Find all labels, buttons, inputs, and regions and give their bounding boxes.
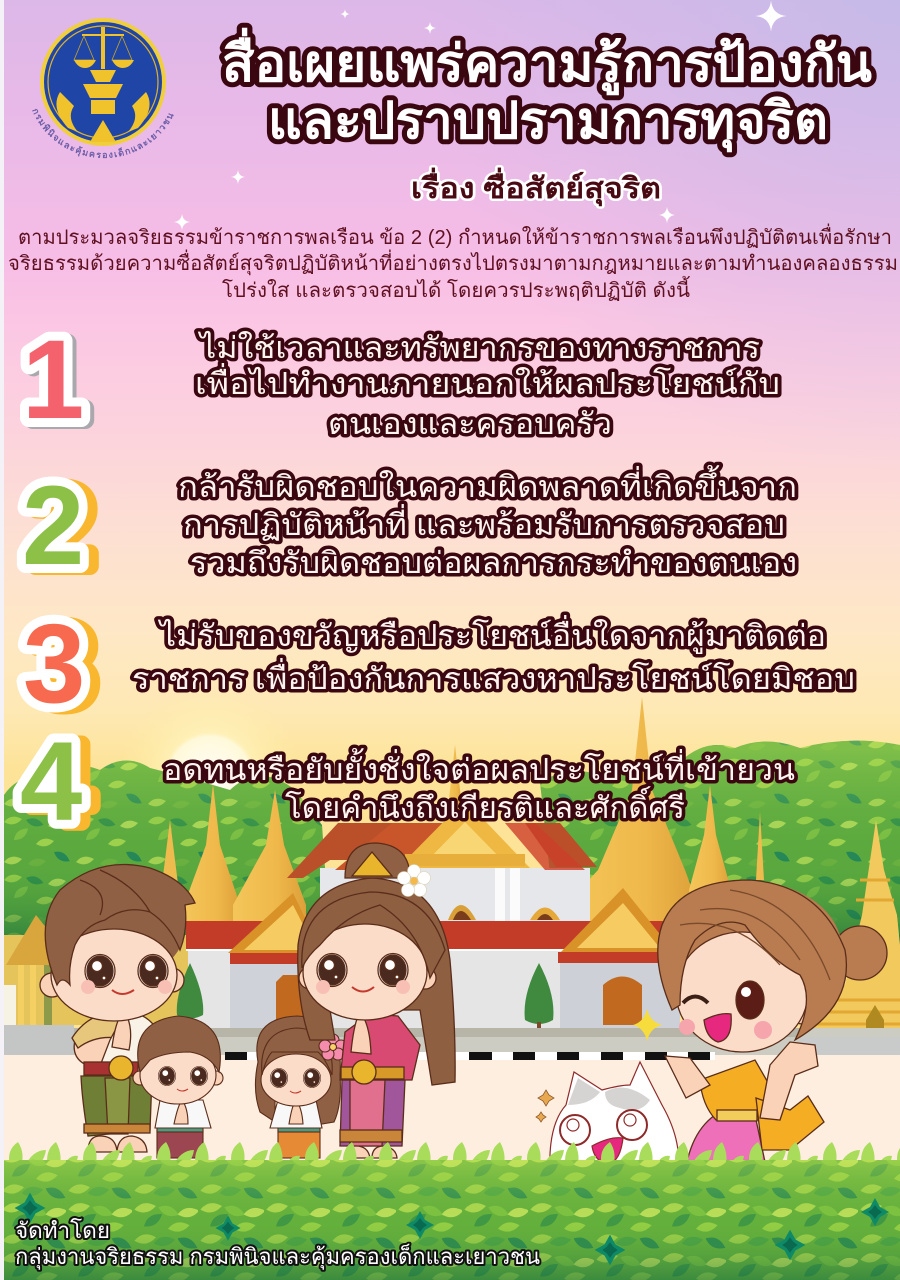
number 3: 3 xyxy=(23,601,85,726)
central hall xyxy=(287,800,597,923)
lower walls xyxy=(188,950,680,1028)
item 3 xyxy=(23,601,855,726)
sparkles xyxy=(174,0,787,230)
item 1 text xyxy=(195,330,780,441)
temple complex xyxy=(4,697,900,1055)
character: woman xyxy=(298,843,455,1158)
sparkle: gold star xyxy=(633,1009,662,1041)
character: girl xyxy=(255,1016,347,1158)
roof gables xyxy=(228,888,675,964)
pavement and kerb xyxy=(4,1028,900,1170)
footer credit: กลุ่มงานจริยธรรม กรมพินิจและคุ้มครองเด็กและเยาวชน xyxy=(15,1242,540,1270)
flower xyxy=(398,864,430,896)
intro paragraph: ตามประมวลจริยธรรมข้าราชการพลเรือน ข้อ 2 (2) กำหนดให้ข้าราชการพลเรือนพึงปฏิบัติตนเพื่อรักษา xyxy=(18,223,892,249)
item 1 text: ตนเองและครอบครัว xyxy=(328,408,612,441)
golden chedis xyxy=(184,697,731,925)
item 2 text: การปฏิบัติหน้าที่ และพร้อมรับการตรวจสอบ xyxy=(183,504,785,542)
logo inner ring xyxy=(48,26,158,138)
item 2 text xyxy=(178,465,797,580)
character: winking woman xyxy=(658,880,887,1162)
footer credit xyxy=(15,1218,540,1270)
subtitle: เรื่อง ซื่อสัตย์สุจริต xyxy=(411,167,661,206)
number 1: 1 xyxy=(22,317,84,442)
item 2 text: กล้ารับผิดชอบในความผิดพลาดที่เกิดขึ้นจาก xyxy=(178,465,797,504)
tree line xyxy=(4,741,900,965)
right stepped pagoda xyxy=(812,820,900,1035)
logo emblem xyxy=(42,20,164,144)
item 4 text: โดยคำนึงถึงเกียรติและศักดิ์ศรี xyxy=(285,786,685,825)
item 4 text xyxy=(163,748,795,825)
character: cat xyxy=(550,1062,679,1172)
small trees xyxy=(177,963,553,1038)
logo ring text: กรมพินิจและคุ้มครองเด็กและเยาวชน xyxy=(32,108,174,158)
item 2 text: รวมถึงรับผิดชอบต่อผลการกระทำของตนเอง xyxy=(190,547,797,580)
sun xyxy=(118,686,302,870)
title: สื่อเผยแพร่ความรู้การป้องกัน xyxy=(222,28,872,96)
item 3 text: ราชการ เพื่อป้องกันการแสวงหาประโยชน์โดยมิชอบ xyxy=(132,658,855,696)
item 1 text: ไม่ใช้เวลาและทรัพยากรของทางราชการ xyxy=(198,330,760,365)
intro paragraph: จริยธรรมด้วยความซื่อสัตย์สุจริตปฏิบัติหน้าที่อย่างตรงไปตรงมาตามกฎหมายและตามทำนองคลองธรรม xyxy=(8,249,898,276)
cat sparkles xyxy=(536,1090,554,1122)
number 4: 4 xyxy=(20,719,82,844)
item 2 xyxy=(22,463,797,588)
item 1 xyxy=(22,317,780,442)
number 2: 2 xyxy=(22,463,84,588)
character: man xyxy=(40,864,195,1152)
item 4 text: อดทนหรือยับยั้งชั่งใจต่อผลประโยชน์ที่เข้ายวน xyxy=(163,748,795,787)
item 4 xyxy=(20,719,795,844)
intro paragraph: โปร่งใส และตรวจสอบได้ โดยควรประพฤติปฏิบัติ ดังนี้ xyxy=(222,276,690,302)
left gold pagoda hall xyxy=(4,915,194,1055)
logo xyxy=(32,18,174,158)
character: boy xyxy=(133,1016,223,1158)
item 3 text xyxy=(132,615,855,696)
footer credit: จัดทำโดย xyxy=(15,1218,110,1243)
title: และปราบปรามการทุจริต xyxy=(268,92,828,153)
item 1 text: เพื่อไปทำงานภายนอกให้ผลประโยชน์กับ xyxy=(195,363,780,401)
item 3 text: ไม่รับของขวัญหรือประโยชน์อื่นใดจากผู้มาติดต่อ xyxy=(158,615,826,654)
doors xyxy=(276,975,305,1025)
front hedge xyxy=(4,1136,900,1280)
thin spires xyxy=(161,812,764,892)
logo scales and pedestal xyxy=(56,27,150,142)
intro paragraph xyxy=(8,223,898,302)
title xyxy=(222,28,872,153)
